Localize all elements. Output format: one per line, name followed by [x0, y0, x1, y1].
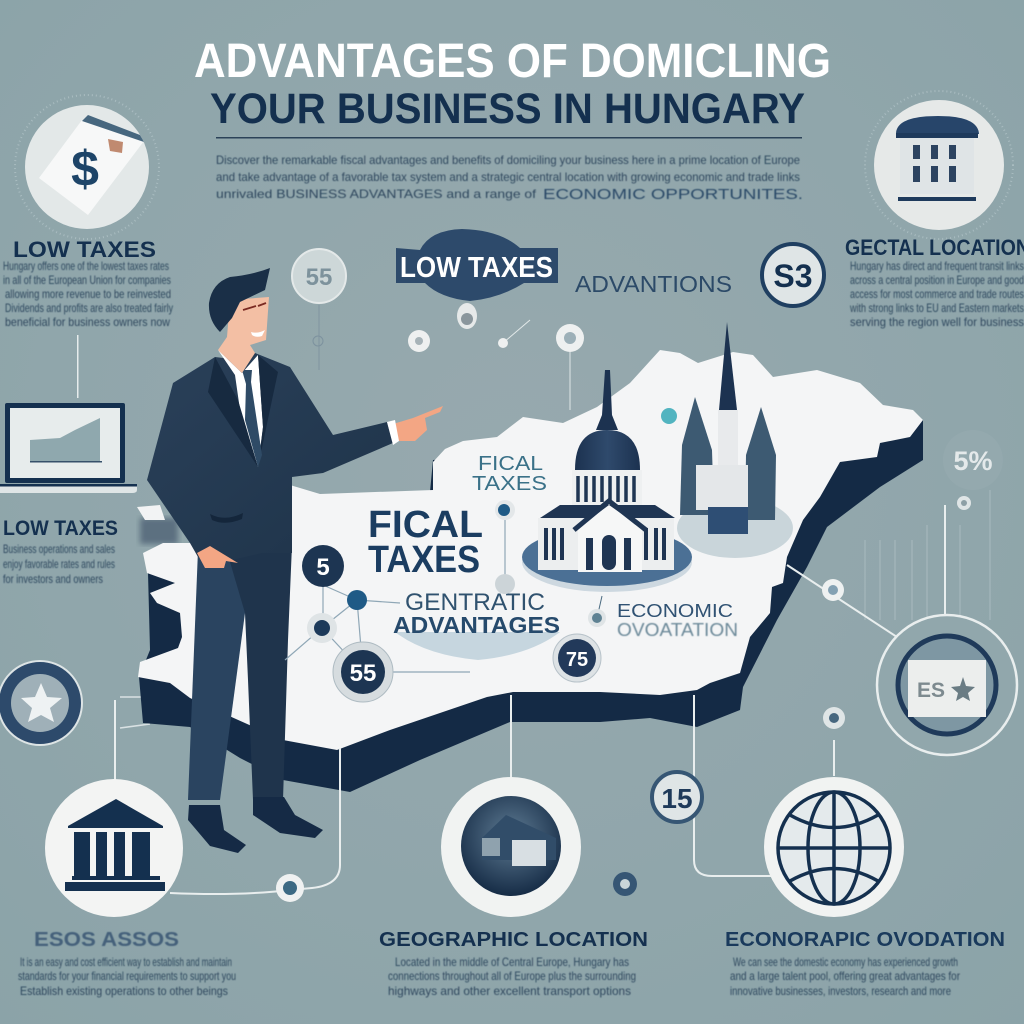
badge: 5 percent: 5% — [953, 446, 993, 476]
panel: laptop with low taxes: enjoy favorable rates and rules — [3, 557, 115, 571]
panel: laptop with low taxes — [0, 403, 137, 586]
tie — [242, 370, 262, 467]
hair — [209, 268, 270, 332]
panel: bottom left bank: It is an easy and cost efficient way to establish and maintain — [20, 955, 232, 969]
panel: economic innovation: ECONORAPIC OVODATION — [725, 929, 1005, 951]
small label: fiscal taxes: FICAL — [478, 453, 543, 475]
left leg — [188, 550, 250, 800]
teal dot — [661, 408, 677, 424]
icon: laptop chart — [0, 403, 137, 493]
panel: laptop with low taxes: for investors and owners — [3, 572, 103, 586]
icon: globe — [778, 792, 890, 904]
map of Hungary — [138, 350, 923, 750]
panel: low taxes top left — [3, 95, 173, 329]
panel: star card right: ES — [917, 679, 945, 702]
badge: 5 percent — [943, 430, 1003, 490]
eye and brow — [243, 303, 266, 310]
title: YOUR BUSINESS IN HUNGARY — [210, 85, 805, 133]
intro paragraph: and take advantage of a favorable tax system and a strategic central location with growing economic and trade links — [216, 170, 800, 184]
panel: economic innovation: and a large talent pool, offering great advantages for — [730, 969, 960, 983]
man presenter — [147, 268, 443, 853]
panel: central location top right — [845, 91, 1024, 329]
panel: geographic location: highways and other excellent transport options — [388, 984, 631, 998]
panel: geographic location: GEOGRAPHIC LOCATION — [379, 929, 648, 951]
panel: bottom left bank: Establish existing operations to other beings — [20, 984, 228, 998]
icon: tax document with dollar: $ — [71, 141, 99, 197]
banner: low taxes — [396, 229, 558, 301]
badge: 15: 15 — [661, 783, 693, 814]
network nodes on map: 5 — [316, 554, 330, 581]
map shadow extrusion — [139, 420, 923, 792]
panel: low taxes top left: allowing more revenue to be reinvested — [5, 287, 171, 301]
panel: star card right — [877, 615, 1017, 755]
panel: low taxes top left: LOW TAXES — [13, 237, 156, 262]
panel: low taxes top left: in all of the European Union for companies — [3, 273, 171, 287]
intro paragraph: Discover the remarkable fiscal advantages and benefits of domiciling your business here in a prime location of Europe — [216, 153, 800, 167]
small label: fiscal taxes: TAXES — [472, 473, 547, 495]
panel: laptop with low taxes: Business operations and sales — [3, 542, 115, 556]
panel: economic innovation — [725, 777, 1005, 998]
intro paragraph: unrivaled BUSINESS ADVANTAGES and a range of — [216, 187, 537, 201]
label: advantions: ADVANTIONS — [575, 271, 732, 297]
label: economic — [617, 601, 738, 640]
network nodes on map — [285, 500, 606, 702]
panel: geographic location — [379, 777, 648, 998]
icon: globe photo — [461, 796, 561, 896]
node on connector — [276, 874, 304, 902]
panel: bottom left bank — [18, 779, 236, 998]
badge: star — [0, 661, 82, 745]
panel: geographic location: Located in the middle of Central Europe, Hungary has — [395, 955, 629, 969]
label: generic advantages with ribbon: ADVANTAGES — [393, 612, 560, 638]
panel: low taxes top left: beneficial for business owners now — [5, 315, 170, 329]
panel: bottom left bank: standards for your financial requirements to support you — [18, 969, 236, 983]
icon: building — [896, 116, 979, 201]
badge: 15 — [652, 772, 702, 822]
icon: tax document with dollar — [39, 115, 144, 215]
head — [218, 297, 269, 373]
badge: 38 ring — [762, 244, 824, 306]
cathedral tower and trees — [677, 322, 793, 558]
parliament building — [522, 370, 692, 592]
label: generic advantages with ribbon — [393, 589, 560, 660]
panel: economic innovation: innovative businesses, investors, research and more — [730, 984, 951, 998]
faint grid lines — [865, 490, 990, 620]
hand pointing — [393, 406, 443, 441]
panel: low taxes top left: Dividends and profits are also treated fairly — [5, 301, 173, 315]
small label: fiscal taxes — [472, 453, 547, 495]
node dark — [613, 872, 637, 896]
intro paragraph: ECONOMIC OPPORTUNITES. — [543, 186, 803, 203]
label: economic: OVOATATION — [617, 620, 738, 640]
panel: low taxes top left: Hungary offers one of the lowest taxes rates — [3, 259, 169, 273]
network nodes on map: 55 — [350, 660, 376, 687]
connectors from map to circles — [115, 505, 945, 894]
shoes — [188, 797, 323, 853]
node under 5 percent — [957, 496, 971, 510]
shirt — [218, 350, 263, 467]
panel: bottom left bank: ESOS ASSOS — [34, 929, 179, 951]
jacket — [147, 353, 393, 563]
smile — [251, 330, 265, 337]
node on line to card — [822, 579, 844, 601]
title: ADVANTAGES OF DOMICLING — [194, 35, 831, 88]
large label: fiscal taxes — [368, 504, 483, 581]
map left fragments — [120, 505, 178, 728]
panel: laptop with low taxes: LOW TAXES — [3, 517, 118, 540]
badge: number bubble — [292, 249, 346, 303]
intro paragraph — [216, 153, 803, 203]
connector: low taxes to laptop — [77, 335, 78, 398]
right leg — [225, 545, 292, 800]
icon: bank — [65, 799, 165, 891]
hand in pocket — [197, 546, 238, 568]
network nodes on map: 75 — [566, 649, 588, 671]
label: generic advantages with ribbon: GENTRATIC — [405, 589, 545, 616]
small node on right — [823, 707, 845, 729]
label: economic: ECONOMIC — [617, 601, 733, 621]
badge: number bubble: 55 — [306, 264, 332, 291]
badge: 38 ring: S3 — [773, 258, 813, 294]
banner: low taxes: LOW TAXES — [400, 252, 553, 284]
pocket flap — [210, 513, 243, 523]
title — [194, 35, 831, 138]
large label: fiscal taxes: FICAL — [368, 504, 483, 546]
large label: fiscal taxes: TAXES — [368, 539, 480, 581]
lapel — [208, 355, 278, 467]
small nodes above map — [313, 303, 584, 410]
panel: geographic location: connections throughout all of Europe plus the surrounding — [388, 969, 636, 983]
